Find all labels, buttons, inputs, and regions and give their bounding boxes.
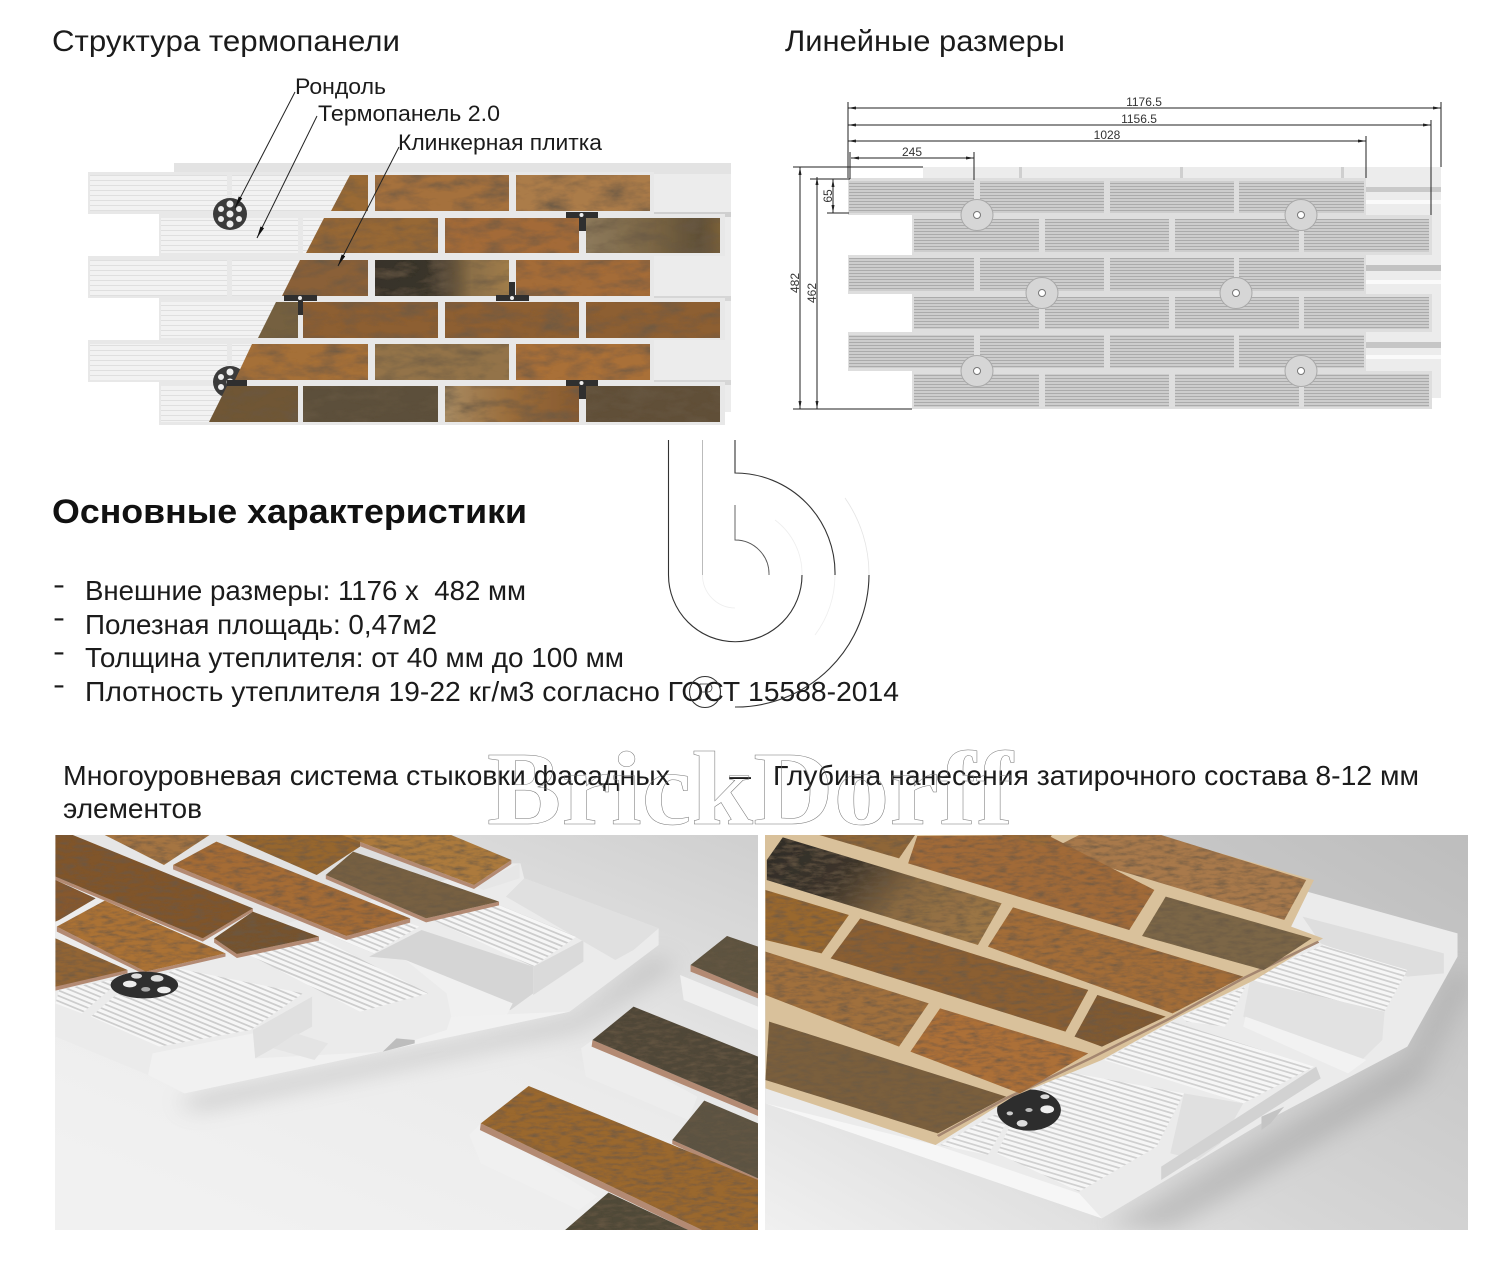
heading: panel structure: Структура термопанели	[52, 25, 400, 58]
heading: main characteristics: Основные характеристики	[52, 493, 527, 531]
caption: docking system: Многоуровневая система стыковки фасадных	[63, 760, 670, 791]
shadow under foam	[184, 950, 670, 1113]
arrow: thermopanel	[257, 116, 317, 238]
loose foam bricks	[469, 975, 758, 1210]
dimension: 482: 482	[788, 273, 802, 293]
icon: connectors	[227, 212, 598, 399]
bullet: insulation density: -	[53, 669, 65, 700]
icon: rondel fasteners	[961, 200, 1317, 386]
photo: multilevel docking system	[55, 835, 758, 1230]
bullet: useful area: Полезная площадь: 0,47м2	[85, 609, 437, 640]
panel: thermopanel structure illustration	[88, 74, 731, 425]
tiles on panel	[55, 835, 511, 987]
dimension: 462: 462	[805, 283, 819, 303]
tiles with grout joints	[765, 835, 1312, 1133]
caption: grout depth: –	[729, 760, 752, 791]
foam panel base	[88, 163, 731, 425]
dimension: 245: 245	[902, 145, 922, 159]
dimension: 1176.5: 1176.5	[1126, 95, 1162, 109]
photo: grout depth	[765, 835, 1468, 1230]
dimension: 65: 65	[821, 189, 835, 203]
caption: grout depth: Глубина нанесения затирочного состава 8-12 мм	[773, 760, 1419, 791]
loose tiles	[481, 936, 758, 1230]
ribbed bricks	[849, 181, 1429, 407]
arrow: rondel	[235, 92, 295, 208]
bullet: external dimensions: -	[53, 569, 65, 600]
dimension: 1156.5: 1156.5	[1121, 112, 1157, 126]
bullet: insulation thickness: Толщина утеплителя: от 40 мм до 100 мм	[85, 642, 624, 673]
dimension: 1028: 1028	[1094, 128, 1121, 142]
panel: linear dimensions drawing	[788, 95, 1441, 409]
label: thermopanel 2.0: Термопанель 2.0	[318, 101, 500, 126]
bullet: insulation density: Плотность утеплителя 19-22 кг/м3 согласно ГОСТ 15588-2014	[85, 676, 899, 707]
clinker tiles	[209, 175, 720, 422]
foam panel silhouette	[848, 167, 1441, 409]
ribbed foam blocks	[56, 906, 576, 1046]
foam body	[55, 863, 659, 1093]
dimension lines	[793, 102, 1441, 409]
shadow under foam	[1106, 963, 1468, 1230]
list: characteristics	[53, 569, 899, 707]
grout layer	[765, 835, 1323, 1145]
bullet: useful area: -	[53, 602, 65, 633]
foam body	[765, 892, 1458, 1218]
ribbed foam blocks	[940, 945, 1407, 1192]
icon: rondel lower	[213, 366, 247, 398]
icon: black rondel	[111, 972, 178, 998]
loose tile edges	[480, 965, 758, 1230]
label: rondel: Рондоль	[295, 74, 386, 99]
label: clinker tile: Клинкерная плитка	[398, 130, 603, 155]
bullet: external dimensions: Внешние размеры: 1176 х 482 мм	[85, 575, 526, 606]
arrow: clinker tile	[338, 147, 399, 266]
icon: rondel upper	[213, 198, 247, 230]
icon: watermark logo	[668, 440, 869, 708]
watermark: BrickDorff wordmark: BrickDorff	[487, 730, 1014, 847]
tile cut edge	[938, 942, 1318, 1136]
caption: docking system	[63, 760, 670, 824]
heading: linear dimensions: Линейные размеры	[785, 25, 1065, 58]
bullet: insulation thickness: -	[53, 636, 65, 667]
caption: docking system: элементов	[63, 793, 202, 824]
icon: black rondel	[997, 1089, 1061, 1131]
tile edges	[55, 835, 511, 991]
